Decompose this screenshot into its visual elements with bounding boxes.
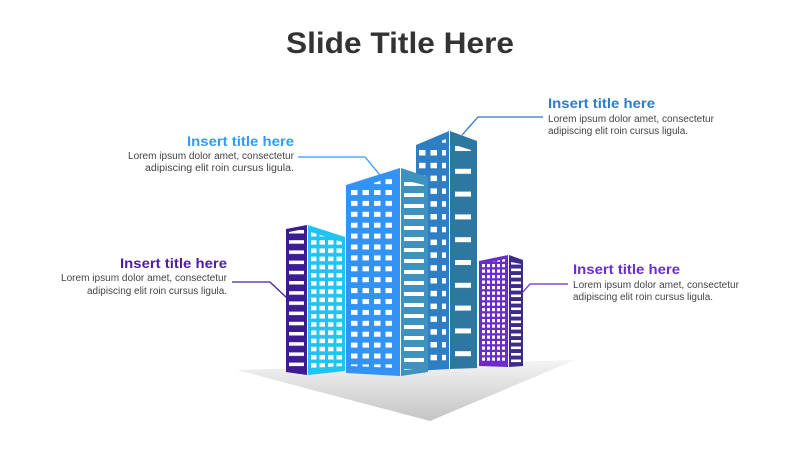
callout: right: Lorem ipsum dolor amet, consectetur [573,280,740,291]
callout: top-right: adipiscing elit roin cursus ligula. [548,126,688,137]
callout: right [522,262,740,303]
callout: top-left: Lorem ipsum dolor amet, consectetur [128,151,295,162]
ground shadow [237,360,575,421]
callout: left: adipiscing elit roin cursus ligula. [87,286,227,297]
callout: top-right [462,96,715,137]
building D: small purple [479,255,523,367]
callout: right: adipiscing elit roin cursus ligula. [573,292,713,303]
title: Slide Title Here [286,27,514,60]
callout: top-right: Insert title here [548,96,656,111]
building B: middle blue [346,168,428,376]
callout: top-left: Insert title here [187,134,295,149]
callout: top-left: adipiscing elit roin cursus ligula. [145,163,294,174]
callout: right: Insert title here [573,262,681,277]
callout: left: Insert title here [120,256,228,271]
building C: tall steel blue [416,131,477,371]
building A: purple / cyan [286,225,345,375]
callout: left [61,256,287,298]
callout: top-right: Lorem ipsum dolor amet, consectetur [548,114,715,125]
callout: top-left [128,134,380,175]
callout: left: Lorem ipsum dolor amet, consectetur [61,273,228,284]
